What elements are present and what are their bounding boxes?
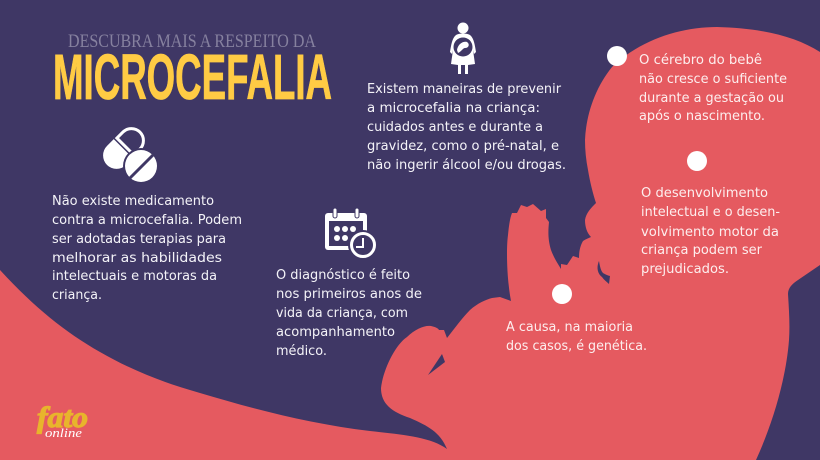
eye notch (598, 261, 610, 284)
text: prevention: não ingerir álcool e/ou drogas. (367, 157, 566, 173)
icon: pills (97, 123, 159, 184)
text: prevention (367, 82, 566, 173)
text: diagnosis: médico. (276, 343, 327, 359)
text: cause (506, 320, 647, 354)
text: cause: dos casos, é genética. (506, 338, 647, 354)
text: diagnosis: vida da criança, com (276, 306, 408, 321)
subtitle: DESCUBRA MAIS A RESPEITO DA (68, 31, 316, 52)
logo: fato online: online (45, 425, 82, 440)
text: medication: contra a microcefalia. Podem (52, 213, 242, 228)
text: development (641, 186, 780, 277)
text: development: volvimento motor da (641, 225, 779, 240)
ear notch (428, 354, 445, 375)
text: medication: ser adotadas terapias para (52, 232, 226, 247)
text: prevention: gravidez, como o pré-natal, e (367, 138, 559, 154)
text: cause: A causa, na maioria (506, 320, 633, 335)
marker dot: development (687, 151, 707, 171)
text: diagnosis: O diagnóstico é feito (276, 267, 410, 283)
text: development: prejudicados. (641, 262, 729, 277)
text: medication (52, 194, 242, 303)
text: prevention: Existem maneiras de prevenir (367, 82, 562, 97)
text: brain: durante a gestação ou (639, 91, 784, 106)
icon: pregnant woman (450, 22, 476, 74)
text: development: O desenvolvimento (641, 186, 768, 201)
text: development: criança podem ser (641, 243, 763, 258)
text: diagnosis (276, 267, 422, 359)
icon: calendar with clock (325, 208, 378, 260)
text: diagnosis: nos primeiros anos de (276, 287, 422, 302)
marker dot: brain (607, 46, 627, 66)
text: diagnosis: acompanhamento (276, 325, 395, 340)
text: medication: intelectuais e motoras da (52, 269, 217, 284)
text: brain: não cresce o suficiente (639, 72, 787, 87)
text: prevention: cuidados antes e durante a (367, 120, 543, 135)
text: prevention: a microcefalia na criança: (367, 101, 540, 116)
marker dot: cause (552, 284, 572, 304)
text: brain (639, 52, 787, 124)
text: brain: após o nascimento. (639, 108, 765, 124)
logo: fato online: fato (37, 401, 88, 434)
text: medication: criança. (52, 288, 102, 303)
text: development: intelectual e o desen- (641, 205, 780, 220)
title: MICROCEFALIA (53, 41, 332, 113)
text: brain: O cérebro do bebê (639, 52, 762, 68)
text: medication: melhorar as habilidades (52, 251, 222, 266)
text: medication: Não existe medicamento (52, 194, 214, 209)
